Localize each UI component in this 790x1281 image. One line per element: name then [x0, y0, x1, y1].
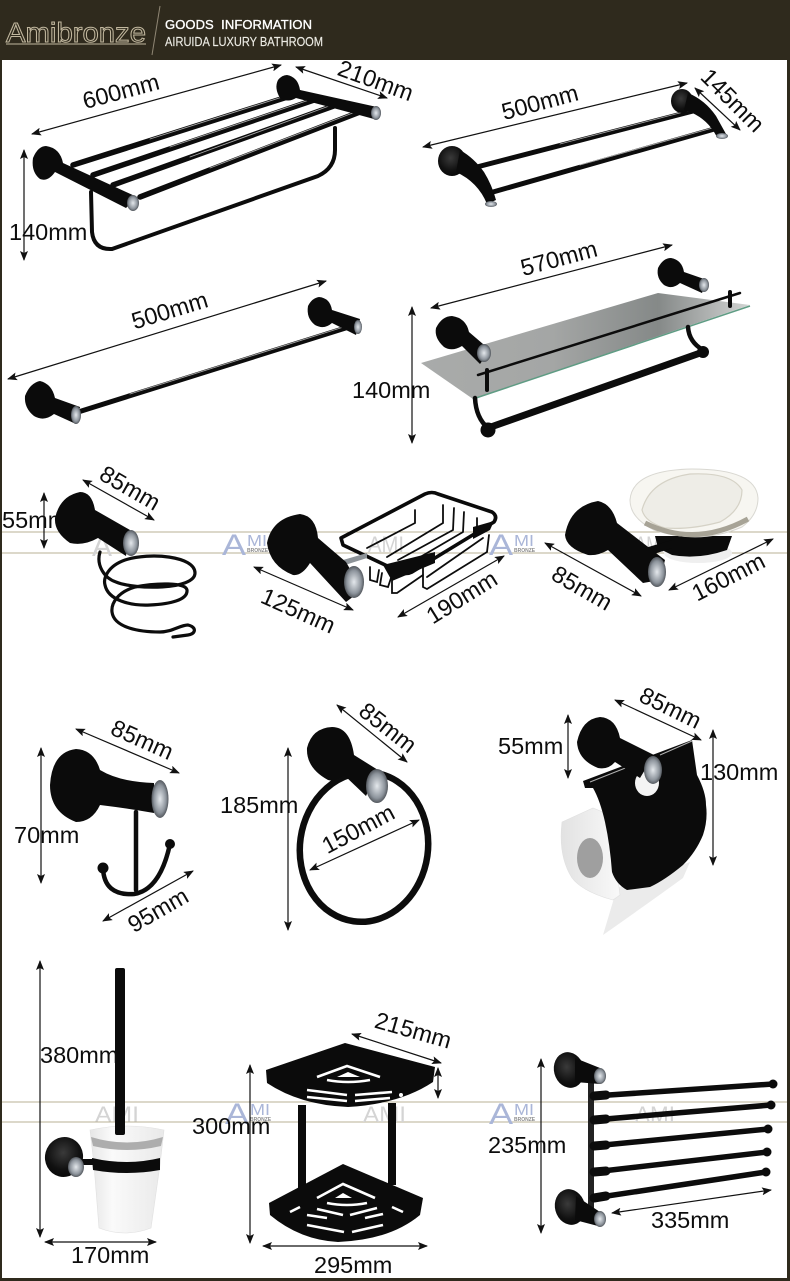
label: 380mm: 380mm	[40, 1042, 118, 1068]
header bar	[0, 0, 790, 60]
rack front bracket	[33, 146, 139, 211]
header subtitle: AIRUIDA LUXURY BATHROOM	[165, 34, 323, 49]
watermark band: upper: MI	[247, 533, 267, 550]
header divider	[152, 6, 160, 55]
glass front edge	[473, 306, 750, 399]
watermark band: upper: A	[92, 530, 112, 563]
upper bracket	[550, 1049, 606, 1091]
label: 500mm double bar: 500mm	[499, 80, 581, 125]
watermark band: upper: AMI	[635, 532, 665, 557]
header title: GOODS INFORMATION	[165, 17, 312, 32]
watermark band: upper: A	[222, 529, 246, 562]
watermark band: upper: BRONZE	[247, 548, 269, 554]
label: 85mm dryer: 85mm	[95, 460, 165, 516]
dimension arrows: hook	[41, 729, 193, 921]
holder arm	[645, 540, 672, 556]
basket rim	[341, 492, 496, 574]
item: towel rack with shelf	[9, 55, 417, 260]
ceramic cup	[90, 1126, 164, 1233]
hook stem and arms	[103, 812, 170, 894]
rack back bracket	[276, 75, 381, 120]
hook tips	[98, 839, 175, 874]
lower bracket	[551, 1186, 606, 1228]
single bar highlight	[130, 325, 350, 394]
item: soap dish	[545, 469, 773, 616]
basket front lip	[383, 552, 435, 581]
dimension arrows: glass shelf	[412, 245, 672, 443]
plate edge highlight	[590, 741, 692, 782]
item: swing towel bar	[488, 1049, 778, 1233]
single bar rail	[75, 326, 352, 413]
label: 85mm soap dish: 85mm	[547, 560, 617, 616]
basket wires	[367, 505, 489, 593]
item: corner shelf	[192, 1007, 454, 1278]
double bar rails	[473, 110, 718, 192]
rail joints	[594, 1095, 606, 1198]
label: 85mm ring: 85mm	[354, 697, 422, 758]
black dish holder	[655, 536, 732, 557]
label: 130mm: 130mm	[700, 759, 778, 785]
single bar front bracket	[25, 381, 81, 424]
label: 215mm: 215mm	[372, 1007, 454, 1054]
shelf left bracket	[436, 316, 491, 364]
dimension arrows: basket	[254, 556, 504, 617]
watermark band: lower: AMI	[363, 1102, 406, 1127]
dimension arrows: soap dish	[545, 539, 773, 596]
shelf right bracket	[658, 258, 709, 293]
watermark band: lower: BRONZE	[250, 1117, 272, 1123]
label: 125mm: 125mm	[257, 583, 339, 639]
watermark band: lower: AMI	[95, 1102, 139, 1127]
watermark band: lower: A	[489, 1098, 513, 1131]
decor band	[645, 519, 748, 535]
item: double towel bar	[423, 63, 770, 207]
label: 235mm: 235mm	[488, 1132, 566, 1158]
label: 170mm: 170mm	[71, 1242, 149, 1268]
label: 55mm dryer: 55mm	[2, 507, 67, 533]
label: 335mm: 335mm	[651, 1207, 729, 1233]
item: towel ring	[220, 697, 438, 930]
label: 500mm single bar: 500mm	[128, 286, 211, 334]
basket arm	[343, 553, 367, 565]
ring arm	[80, 1159, 95, 1165]
rack rail highlights	[150, 92, 363, 168]
watermark band: upper	[2, 529, 788, 563]
label: 140mm rack: 140mm	[9, 219, 87, 245]
rail end caps	[762, 1080, 778, 1176]
label: 295mm: 295mm	[314, 1252, 392, 1278]
swing rails	[594, 1084, 773, 1198]
item: glass shelf	[352, 236, 750, 443]
basket bracket	[267, 514, 364, 602]
dimension arrows: brush holder	[40, 961, 156, 1242]
upper tray	[266, 1043, 435, 1107]
dimension arrows: swing bar	[541, 1059, 771, 1233]
soap dish bracket	[565, 501, 666, 587]
watermark band: upper: BRONZE	[514, 548, 536, 554]
paper roll	[561, 808, 620, 900]
lower tray slots	[290, 1184, 403, 1232]
label: 190mm: 190mm	[422, 565, 502, 629]
dimension arrows: paper holder	[568, 700, 713, 865]
basket back lip	[473, 521, 494, 539]
upper tray slots	[307, 1066, 403, 1101]
ring bracket	[307, 727, 388, 803]
rack rails	[73, 93, 365, 197]
cover plate	[583, 740, 707, 890]
double bar highlights	[560, 109, 716, 165]
label: 85mm hook: 85mm	[107, 715, 177, 765]
holder bracket	[577, 717, 662, 784]
watermark band: lower: BRONZE	[514, 1117, 536, 1123]
shelf rail and posts	[478, 292, 740, 390]
label: 85mm paper holder: 85mm	[635, 682, 706, 734]
label: 185mm: 185mm	[220, 792, 298, 818]
cup bracket	[40, 1133, 88, 1181]
item: toilet paper holder	[498, 682, 778, 935]
ring	[290, 764, 438, 930]
watermark band: lower: A	[225, 1098, 249, 1131]
watermark band: lower: MI	[514, 1102, 534, 1119]
dimension arrows: rack	[24, 65, 387, 260]
label: 145mm: 145mm	[696, 63, 770, 137]
item: single towel bar	[8, 281, 362, 424]
dimension arrows: dryer	[44, 480, 154, 548]
label: 160mm: 160mm	[688, 547, 769, 606]
paper tail	[603, 862, 690, 935]
hook bracket	[50, 749, 168, 822]
watermark band: lower: AMI	[635, 1102, 675, 1127]
spiral wire	[99, 552, 195, 637]
label: 55mm paper holder: 55mm	[498, 733, 563, 759]
double bar front bracket	[438, 146, 497, 207]
label: 95mm: 95mm	[123, 882, 193, 938]
towel bar under shelf	[475, 327, 703, 428]
cover hole	[635, 770, 659, 796]
label: 210mm: 210mm	[334, 55, 417, 106]
towel bar ball ends	[480, 346, 709, 438]
roll core	[577, 838, 603, 878]
label: 300mm: 300mm	[192, 1113, 270, 1139]
label: 150mm: 150mm	[318, 799, 399, 859]
label: 600mm: 600mm	[80, 69, 162, 114]
brush handle	[115, 968, 125, 1135]
item: hair dryer holder	[2, 460, 195, 637]
label: 140mm shelf: 140mm	[352, 377, 430, 403]
item: toilet brush holder	[40, 961, 164, 1268]
label: 570mm: 570mm	[518, 236, 600, 281]
dimension arrows: corner shelf	[250, 1034, 441, 1246]
under-bowl highlight	[664, 543, 732, 563]
cup ring	[92, 1158, 160, 1173]
double bar back bracket	[671, 89, 728, 139]
glass pane	[421, 293, 750, 399]
lower tray	[269, 1164, 423, 1242]
dimension arrow: single bar	[8, 281, 326, 379]
label: 70mm: 70mm	[14, 822, 79, 848]
watermark band: lower: MI	[250, 1102, 270, 1119]
soap bar	[642, 474, 742, 528]
vertical post	[588, 1082, 594, 1213]
shelf posts	[298, 1103, 396, 1189]
watermark band: upper: A	[489, 529, 513, 562]
watermark band: lower	[2, 1098, 788, 1131]
single bar back bracket	[308, 297, 362, 335]
brand logo: Amibronze	[6, 17, 146, 48]
item: soap basket	[254, 492, 504, 639]
rack towel hanger	[91, 128, 335, 249]
watermark band: upper: AMI	[368, 532, 404, 557]
ceramic bowl	[630, 469, 758, 537]
decor band	[91, 1137, 163, 1150]
watermark band: upper: MI	[514, 533, 534, 550]
dryer bracket	[55, 492, 139, 556]
dimension arrows: double bar	[423, 83, 740, 147]
dimension arrows: ring	[288, 705, 419, 930]
item: robe hook	[14, 715, 193, 938]
